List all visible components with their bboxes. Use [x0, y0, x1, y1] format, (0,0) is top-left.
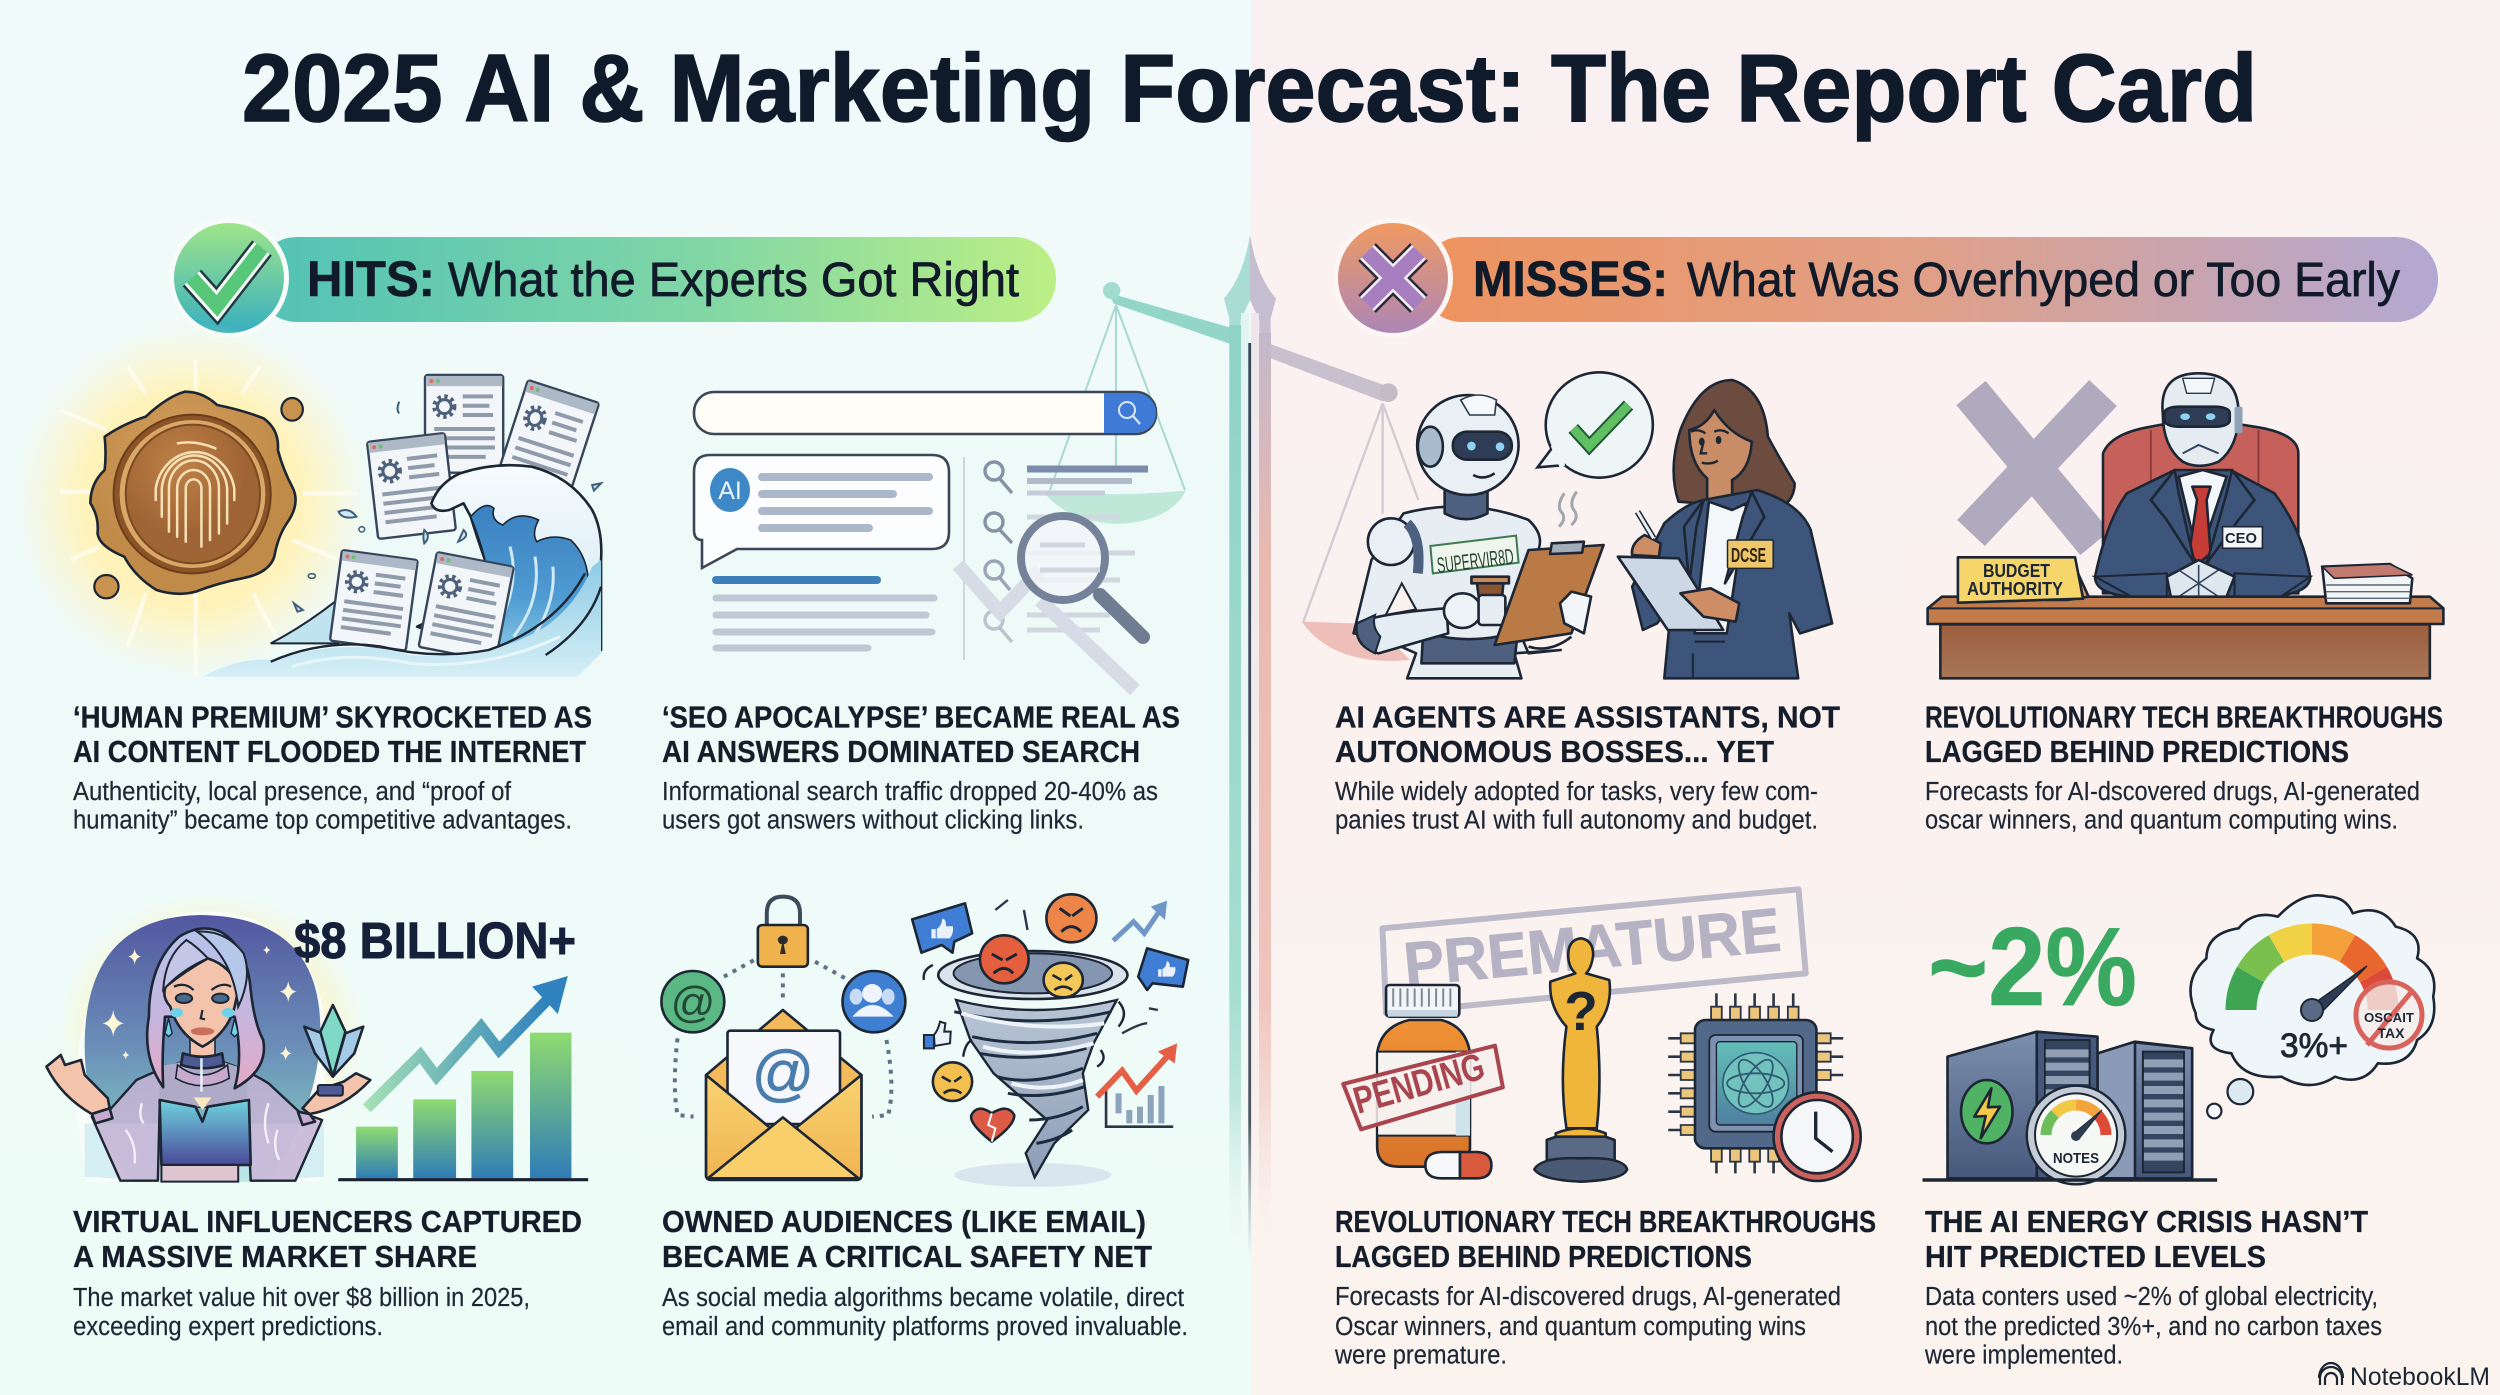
icon: supervised robot and boss: DCSE: [1731, 545, 1766, 567]
heading: virtual influencers: A MASSIVE MARKET SHARE: [73, 1239, 477, 1274]
icon: premature stamp, pill bottle, statuette and chip: PENDING: [1349, 1046, 1489, 1123]
icon: crossed-out robot CEO at desk: [1928, 373, 2443, 678]
heading: tech breakthroughs: LAGGED BEHIND PREDICTIONS: [1925, 734, 2349, 769]
misses banner: What Was Overhyped or Too Early: [1687, 254, 2400, 307]
text: premature breakthroughs: were premature.: [1334, 1342, 1507, 1370]
text: tech breakthroughs: [1925, 778, 2420, 834]
hit 1: human premium: [14, 322, 601, 834]
heading: virtual influencers: [73, 1204, 582, 1274]
heading: human premium: [73, 700, 592, 769]
icon: virtual influencer and growth chart: $8 BILLION+: [294, 912, 576, 969]
heading: premature breakthroughs: LAGGED BEHIND PREDICTIONS: [1335, 1239, 1752, 1274]
heading: premature breakthroughs: [1335, 1204, 1876, 1274]
notebooklm watermark: NotebookLM: [2350, 1363, 2490, 1391]
icon: wax seal with fingerprint: [14, 322, 370, 678]
text: energy crisis: not the predicted 3%+, and no carbon taxes: [1925, 1313, 2382, 1341]
icon: search page with AI answer: AI: [718, 477, 742, 505]
heading: tech breakthroughs: [1925, 700, 2443, 769]
text: owned audiences: As social media algorithms became volatile, direct: [662, 1284, 1184, 1312]
icon: data centre, gauges and thought cloud: [1922, 895, 2434, 1184]
text: owned audiences: email and community platforms proved invaluable.: [662, 1313, 1188, 1341]
icon: crossed-out robot CEO at desk: AUTHORITY: [1967, 579, 2063, 599]
hits banner: HITS:: [307, 251, 435, 307]
central balance scale: [1043, 235, 1418, 1260]
text: seo apocalypse: users got answers without clicking links.: [662, 806, 1084, 834]
icon: search page with AI answer: [694, 392, 1156, 690]
icon: data centre, gauges and thought cloud: 3%+: [2280, 1027, 2348, 1065]
icon: virtual influencer and growth chart: [46, 893, 588, 1182]
heading: ai agents: AI AGENTS ARE ASSISTANTS, NOT: [1335, 700, 1840, 734]
text: virtual influencers: The market value hit over $8 billion in 2025,: [73, 1284, 530, 1312]
icon: wave of documents: [203, 375, 601, 677]
text: virtual influencers: [73, 1284, 530, 1341]
heading: energy crisis: [1925, 1204, 2368, 1274]
heading: human premium: AI CONTENT FLOODED THE INTERNET: [73, 734, 586, 769]
heading: owned audiences: [662, 1204, 1152, 1274]
heading: seo apocalypse: [662, 700, 1180, 769]
hits banner: [169, 218, 1056, 338]
title: 2025 AI & Marketing Forecast: The Report Card: [242, 35, 2257, 142]
icon: social media tornado: [912, 894, 1188, 1187]
text: premature breakthroughs: Forecasts for AI-discovered drugs, AI-generated: [1335, 1283, 1841, 1311]
text: human premium: [73, 778, 572, 834]
miss 1: ai agents: [1335, 372, 1840, 834]
icon: crossed-out robot CEO at desk: BUDGET: [1983, 561, 2050, 581]
text: premature breakthroughs: Oscar winners, and quantum computing wins: [1335, 1313, 1806, 1341]
heading: ai agents: [1335, 700, 1840, 769]
icon: crossed-out robot CEO at desk: CEO: [2225, 530, 2257, 547]
icon: premature stamp, pill bottle, statuette and chip: [1343, 889, 1861, 1182]
miss 4: ai energy crisis: [1922, 895, 2434, 1370]
heading: virtual influencers: VIRTUAL INFLUENCERS CAPTURED: [73, 1204, 582, 1239]
text: tech breakthroughs: oscar winners, and quantum computing wins.: [1925, 806, 2398, 834]
text: ai agents: [1335, 778, 1818, 834]
icon: email, lock and community network: @: [671, 978, 715, 1027]
background right half: [1251, 0, 2500, 1395]
misses banner: MISSES:: [1473, 251, 1668, 307]
heading: premature breakthroughs: REVOLUTIONARY TECH BREAKTHROUGHS: [1335, 1204, 1876, 1239]
icon: premature stamp, pill bottle, statuette and chip: PREMATURE: [1401, 896, 1784, 1000]
text: human premium: humanity” became top competitive advantages.: [73, 806, 572, 834]
text: tech breakthroughs: Forecasts for AI-dscovered drugs, AI-generated: [1925, 778, 2420, 806]
icon: email, lock and community network: @: [752, 1039, 814, 1108]
miss 2: revolutionary tech, robot ceo: [1925, 373, 2443, 834]
text: virtual influencers: exceeding expert predictions.: [73, 1313, 383, 1341]
heading: energy crisis: HIT PREDICTED LEVELS: [1925, 1239, 2266, 1274]
miss 3: premature breakthroughs: [1334, 889, 1876, 1370]
text: owned audiences: [662, 1284, 1188, 1341]
icon: premature stamp, pill bottle, statuette and chip: ?: [1564, 980, 1598, 1042]
heading: seo apocalypse: AI ANSWERS DOMINATED SEARCH: [662, 734, 1140, 769]
heading: owned audiences: OWNED AUDIENCES (LIKE EMAIL): [662, 1204, 1146, 1239]
heading: owned audiences: BECAME A CRITICAL SAFETY NET: [662, 1239, 1152, 1274]
text: seo apocalypse: Informational search traffic dropped 20-40% as: [662, 778, 1158, 806]
text: energy crisis: were implemented.: [1924, 1342, 2123, 1370]
text: ai agents: While widely adopted for tasks, very few com-: [1335, 778, 1818, 806]
text: premature breakthroughs: [1334, 1283, 1841, 1370]
heading: seo apocalypse: ‘SEO APOCALYPSE’ BECAME REAL AS: [662, 700, 1180, 734]
heading: energy crisis: THE AI ENERGY CRISIS HASN’T: [1925, 1204, 2368, 1239]
background left half: [0, 0, 1251, 1395]
hit 3: virtual influencers: [46, 893, 588, 1341]
text: energy crisis: Data conters used ~2% of global electricity,: [1925, 1283, 2378, 1311]
hit 2: seo apocalypse: [662, 392, 1180, 834]
icon: supervised robot and boss: [1354, 372, 1832, 678]
misses banner: [1333, 218, 2438, 338]
panel: misses: [1333, 218, 2443, 1370]
text: energy crisis: [1924, 1283, 2382, 1370]
text: human premium: Authenticity, local presence, and “proof of: [73, 778, 512, 806]
icon: data centre, gauges and thought cloud: TAX: [2378, 1025, 2405, 1041]
icon: data centre, gauges and thought cloud: ~2%: [1928, 905, 2137, 1029]
heading: ai agents: AUTONOMOUS BOSSES... YET: [1335, 734, 1774, 769]
icon: supervised robot and boss: SUPERVIR8D: [1436, 544, 1515, 578]
hit 4: owned audiences: [661, 894, 1188, 1341]
icon: data centre, gauges and thought cloud: OSCAIT: [2364, 1010, 2414, 1025]
heading: human premium: ‘HUMAN PREMIUM’ SKYROCKETED AS: [73, 700, 592, 734]
text: seo apocalypse: [662, 778, 1158, 834]
text: ai agents: panies trust AI with full autonomy and budget.: [1335, 806, 1818, 834]
hits banner: What the Experts Got Right: [448, 254, 1019, 307]
icon: email, lock and community network: [661, 897, 905, 1180]
panel: hits: [14, 218, 1188, 1341]
icon: data centre, gauges and thought cloud: NOTES: [2053, 1150, 2099, 1167]
